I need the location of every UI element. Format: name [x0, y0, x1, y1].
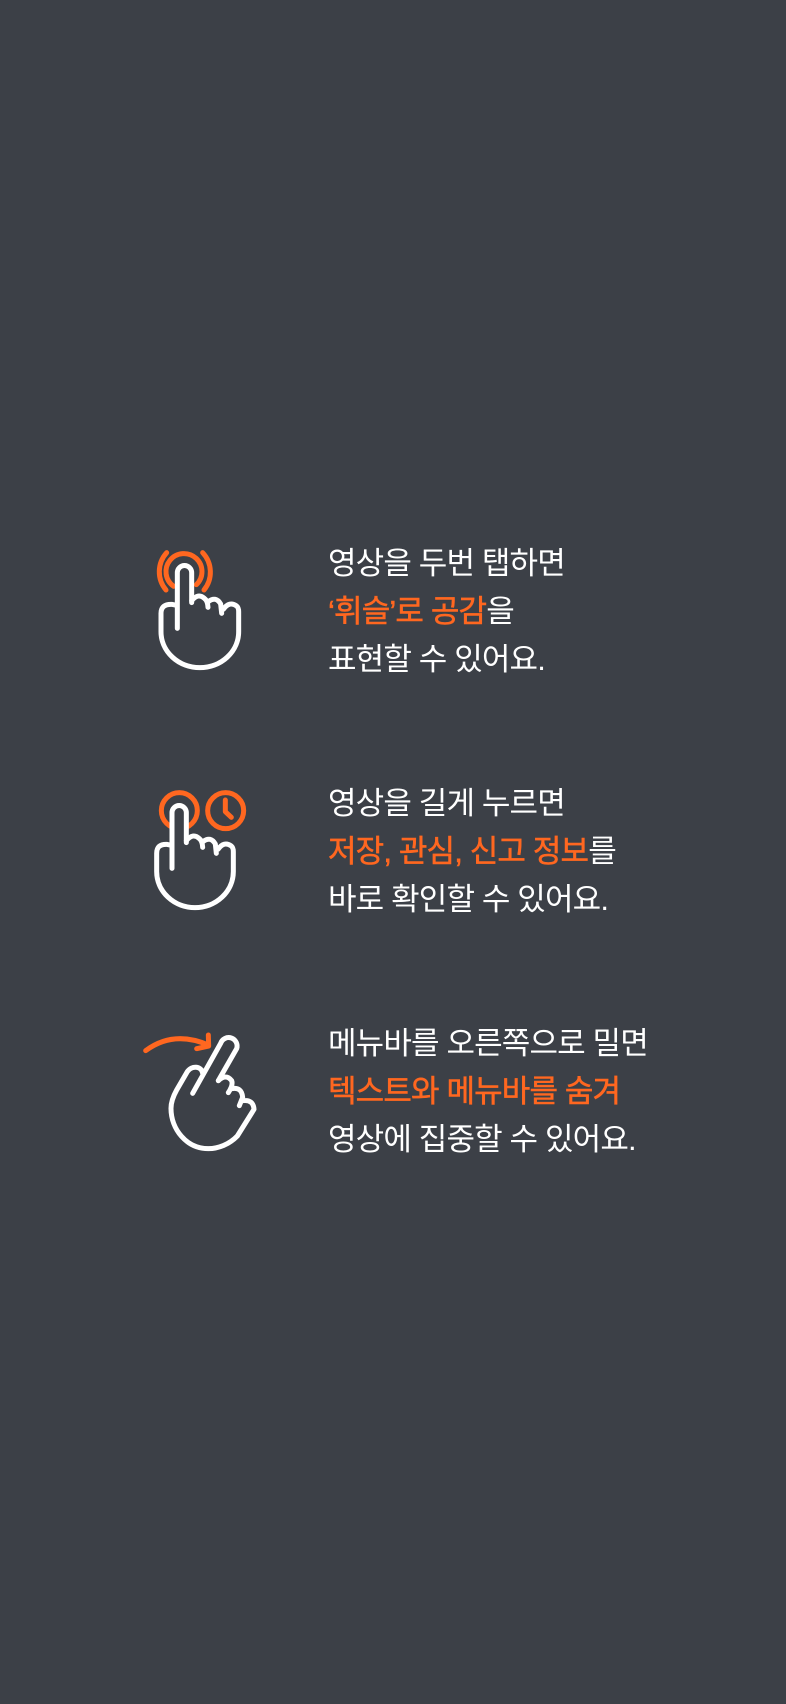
- text block: swipe menu bar: 영상에 집중할 수 있어요.: [328, 1122, 636, 1157]
- icon: long press hand with clock: [157, 793, 244, 908]
- text block: swipe menu bar: 텍스트와 메뉴바를 숨겨: [328, 1074, 620, 1109]
- text block: long press: 바로 확인할 수 있어요.: [328, 882, 608, 917]
- text block: swipe menu bar: 메뉴바를 오른쪽으로 밀면: [328, 1026, 648, 1061]
- text block: double tap: 영상을 두번 탭하면: [328, 546, 565, 581]
- text block: double tap: ‘휘슬’로 공감을: [328, 594, 514, 629]
- text block: double tap: 표현할 수 있어요.: [328, 642, 545, 677]
- text block: long press: [328, 786, 616, 917]
- icon: swipe hand with arrow: [146, 1035, 254, 1149]
- text block: long press: 영상을 길게 누르면: [328, 786, 565, 821]
- icon: double tap hand: [159, 553, 239, 668]
- text block: swipe menu bar: [328, 1026, 648, 1157]
- text block: double tap: [328, 546, 565, 677]
- text block: long press: 저장, 관심, 신고 정보를: [328, 834, 616, 869]
